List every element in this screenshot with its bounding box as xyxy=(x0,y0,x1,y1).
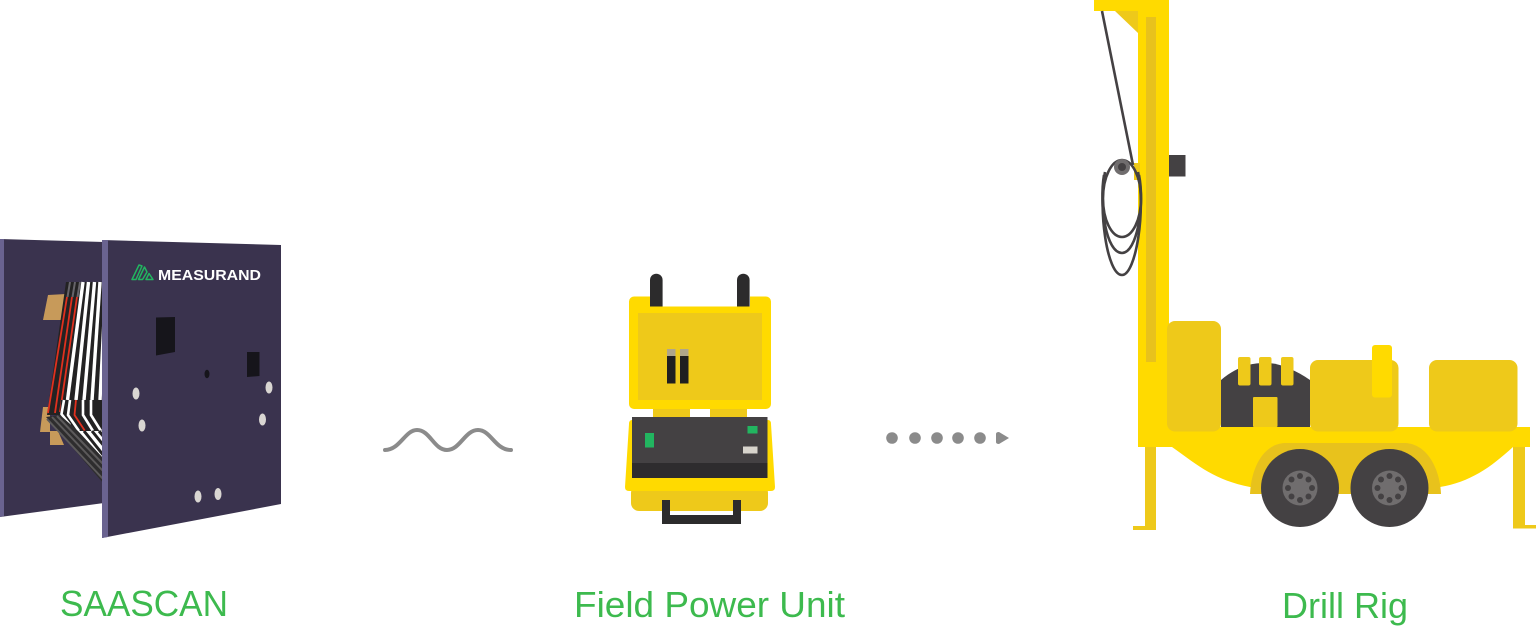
panel cut-outs xyxy=(156,317,260,378)
device: drill rig xyxy=(1094,0,1536,530)
wheels xyxy=(1261,449,1428,527)
hinges xyxy=(653,409,747,419)
logo: Measurand: MEASURAND xyxy=(158,267,261,284)
label: Drill Rig: Drill Rig xyxy=(1282,585,1408,626)
logo: Measurand xyxy=(132,265,261,284)
control panel xyxy=(632,417,768,478)
label: SAASCAN: SAASCAN xyxy=(60,583,228,624)
equipment blocks xyxy=(1167,321,1518,432)
label: Field Power Unit: Field Power Unit xyxy=(574,584,845,625)
case lower shell xyxy=(631,485,768,511)
pulley xyxy=(1114,159,1130,175)
back panel xyxy=(0,239,104,517)
open lid xyxy=(629,296,771,409)
engine housing xyxy=(1221,357,1310,427)
mast xyxy=(1094,0,1169,445)
connector: dotted arrow xyxy=(886,432,1009,444)
cable bundle xyxy=(46,282,105,484)
cable and coils xyxy=(1102,11,1141,275)
tan connector blocks xyxy=(40,294,66,445)
device: SAASCAN xyxy=(0,239,281,538)
fuel cap xyxy=(1372,345,1392,398)
device: field power unit xyxy=(625,274,775,524)
connector: wavy line xyxy=(385,430,511,450)
front panel xyxy=(102,240,281,538)
trailer deck xyxy=(1138,427,1530,487)
mounting holes xyxy=(132,382,272,502)
side bracket xyxy=(1169,155,1186,176)
handle xyxy=(662,500,741,524)
lid clips xyxy=(667,349,688,384)
support legs xyxy=(1133,445,1536,530)
wheel fender xyxy=(1250,443,1441,494)
antennas xyxy=(650,274,750,307)
case upper shell xyxy=(625,420,775,491)
